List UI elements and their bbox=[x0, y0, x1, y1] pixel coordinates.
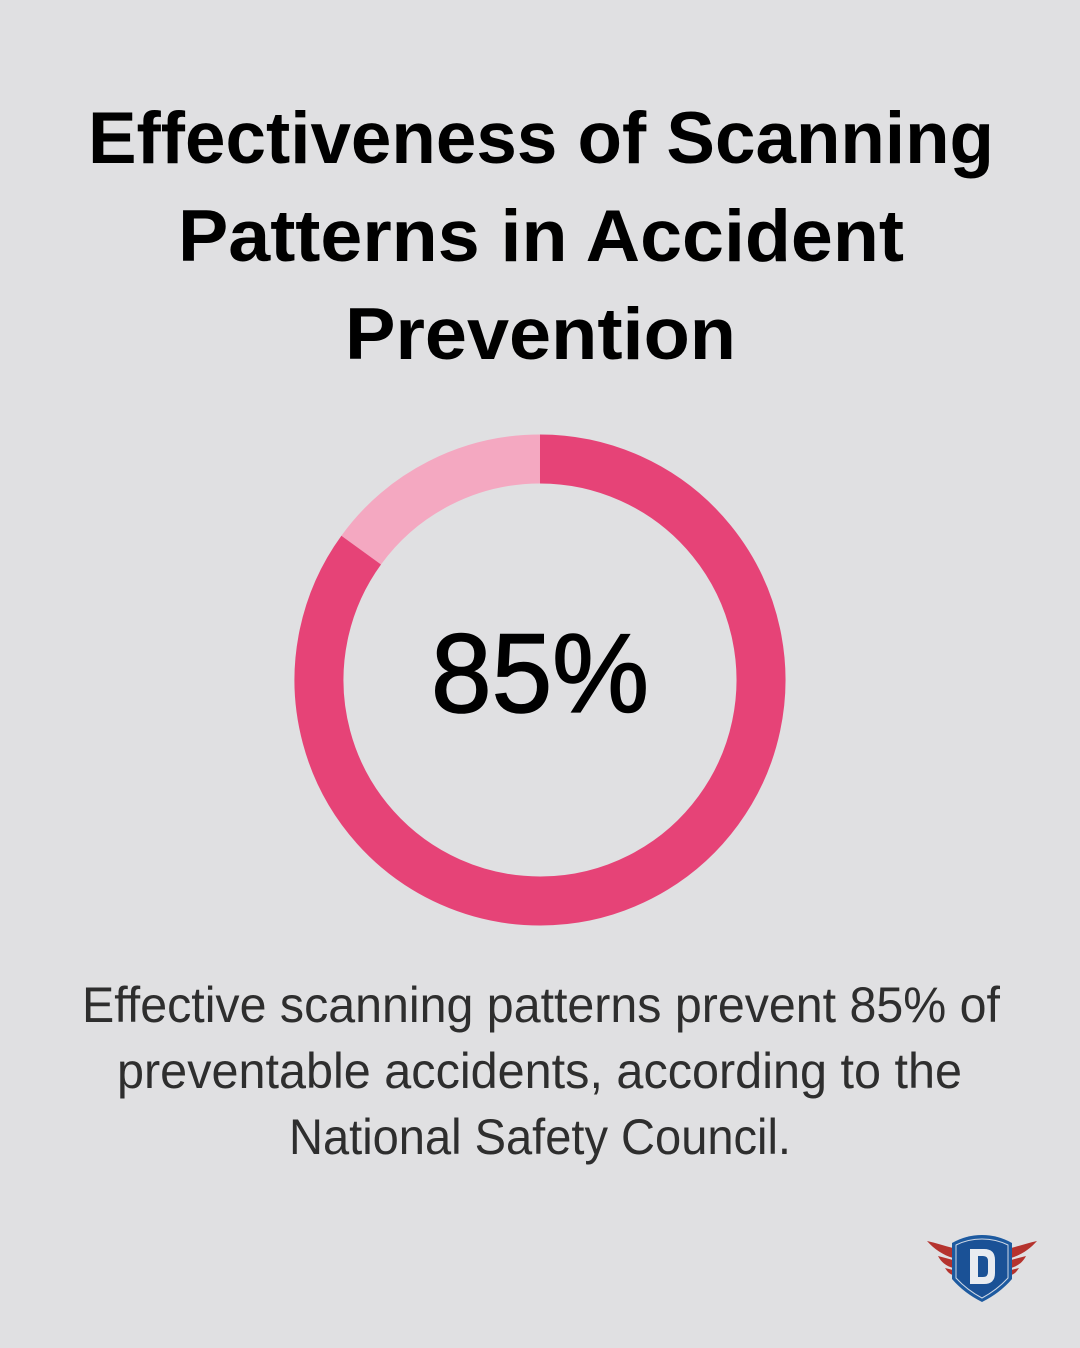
description text: preventable accidents, according to the bbox=[117, 1043, 962, 1099]
title: Prevention bbox=[345, 294, 736, 375]
shield bbox=[952, 1235, 1012, 1302]
right wing bbox=[1011, 1241, 1037, 1275]
highlighted 85% segment bbox=[319, 459, 761, 901]
title bbox=[88, 98, 994, 375]
description text: National Safety Council. bbox=[289, 1109, 791, 1165]
icon: winged shield logo bbox=[927, 1235, 1037, 1302]
shield inner outline bbox=[956, 1239, 1008, 1298]
description text: Effective scanning patterns prevent 85% of bbox=[82, 977, 1000, 1033]
description text bbox=[82, 977, 1000, 1165]
title: Patterns in Accident bbox=[178, 196, 904, 277]
letter D bbox=[970, 1249, 995, 1284]
left wing bbox=[927, 1241, 953, 1275]
donut chart: 85% bbox=[319, 459, 761, 901]
remaining 15% segment bbox=[361, 459, 540, 550]
center value: 85% bbox=[431, 611, 649, 736]
title: Effectiveness of Scanning bbox=[88, 98, 994, 179]
